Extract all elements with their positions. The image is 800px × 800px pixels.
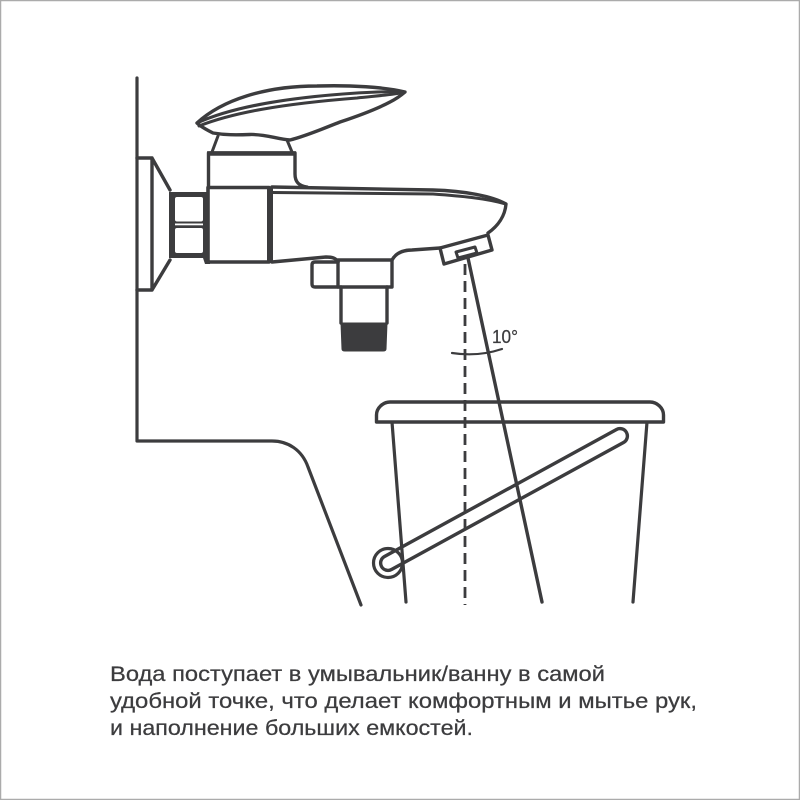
angle label: 10° [492,327,518,347]
spout [272,187,506,233]
water stream angled [468,258,542,602]
threaded end [341,323,387,351]
faucet [137,153,506,351]
lower pipe [341,287,387,323]
handle knob [374,548,402,578]
mixer body [208,188,269,262]
collar [208,153,307,187]
caption: и наполнение больших емкостей. [110,716,473,740]
outlet nut [338,260,392,287]
bucket [374,402,664,602]
caption: Вода поступает в умывальник/ванну в самой [110,662,605,686]
wall and bathtub outline [137,78,361,605]
bucket handle [381,429,627,570]
aerator [440,235,492,264]
caption [110,662,697,740]
handle lever [197,86,405,152]
water stream dashed vertical [464,264,466,605]
angle arc [452,349,502,354]
caption: удобной точке, что делает комфортным и мытье рук, [110,689,697,713]
threaded connector [169,192,210,264]
wall flange [137,158,170,290]
